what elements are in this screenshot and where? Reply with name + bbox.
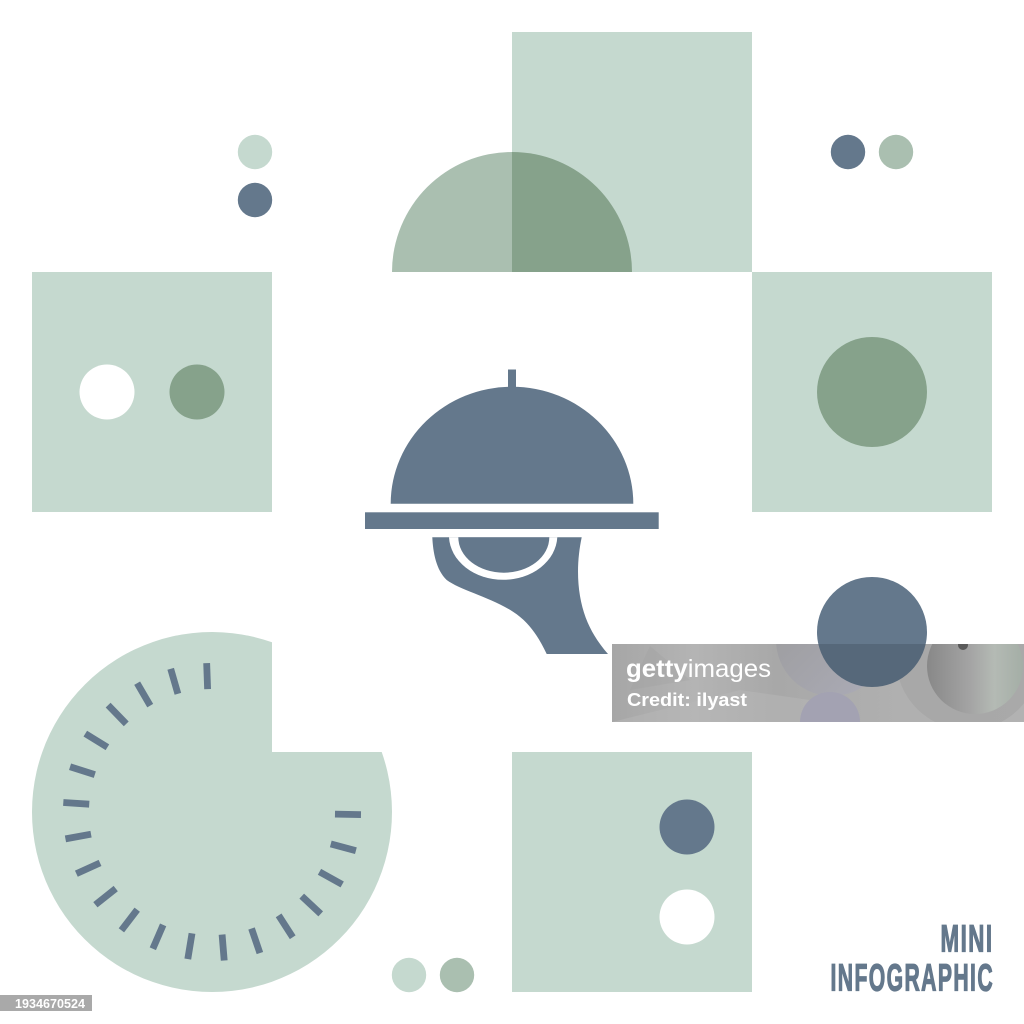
dots: bottom pair xyxy=(392,958,474,992)
image id tag xyxy=(0,995,92,1011)
panel: top square with dome xyxy=(392,32,752,272)
tray xyxy=(365,512,659,529)
palm xyxy=(458,537,549,573)
cloche knob xyxy=(508,370,516,390)
panel: bottom square with two circles xyxy=(512,752,752,992)
panel: right square with circle xyxy=(752,272,992,512)
watermark shapes xyxy=(614,644,1024,722)
watermark text: getty images: gettyimages xyxy=(626,655,771,683)
panel: clock dial with ticks xyxy=(32,632,392,992)
hand ring xyxy=(449,537,557,580)
dots: top left pair xyxy=(238,135,272,217)
half circle: left part xyxy=(392,152,512,272)
hand xyxy=(432,537,608,654)
watermark banner xyxy=(612,644,1024,722)
cloche dome xyxy=(391,387,633,504)
circle: right slate xyxy=(817,577,927,687)
panel: left square with two circles xyxy=(32,272,272,512)
image id tag: 1934670524 xyxy=(15,997,85,1011)
title xyxy=(830,918,994,1000)
dial ticks xyxy=(63,663,361,961)
watermark text: credit: Credit: ilyast xyxy=(627,689,747,710)
dots: top right pair xyxy=(831,135,913,169)
icon: hand holding serving cloche xyxy=(365,370,659,654)
half circle: overlapping right part xyxy=(512,152,632,272)
